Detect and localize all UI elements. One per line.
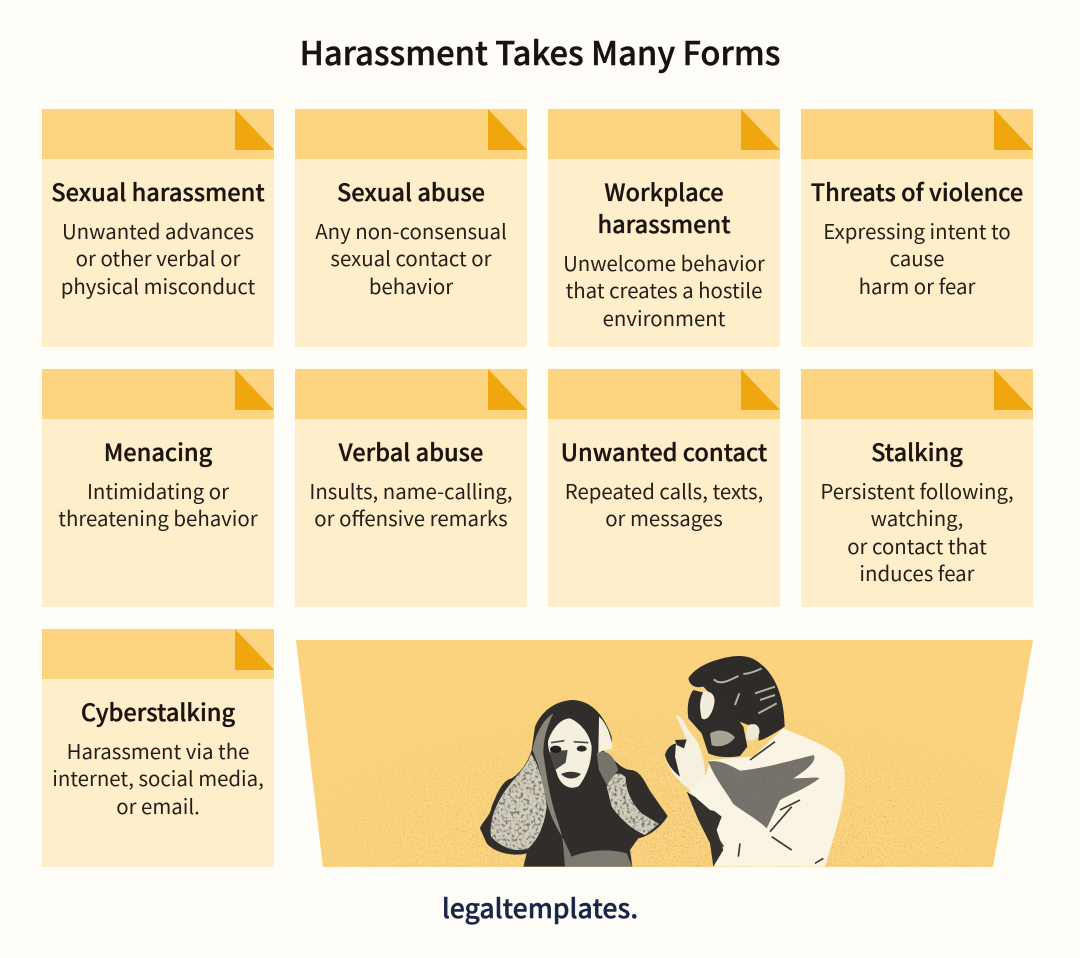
card: sexual abuse: Any non-consensual: [315, 215, 507, 245]
card: threats of violence: [801, 109, 1033, 347]
card: sexual harassment: [42, 109, 274, 347]
man face and beard: [688, 690, 747, 757]
woman eyes: [550, 746, 561, 753]
man hair: [688, 656, 785, 741]
man hair highlights: [714, 668, 777, 713]
card: workplace harassment: Unwelcome behavior: [563, 247, 765, 277]
card: menacing: Intimidating or: [87, 475, 229, 505]
woman brows and mouth: [551, 741, 588, 743]
woman face: [548, 718, 592, 788]
woman sweater hem: [562, 837, 632, 867]
illustration: banner with two figures: [296, 640, 1033, 867]
woman raised hand: [598, 717, 612, 753]
woman face shadow: [550, 750, 568, 770]
card: verbal abuse: or offensive remarks: [314, 502, 508, 532]
woman knit cuff: [597, 752, 618, 785]
card: sexual harassment: or other verbal or: [76, 242, 240, 272]
card: menacing: threatening behavior: [58, 502, 258, 532]
card: verbal abuse: Verbal abuse: [339, 434, 483, 468]
card: sexual abuse: sexual contact or: [330, 242, 492, 272]
card: menacing: Menacing: [104, 434, 212, 468]
card: stalking: [801, 369, 1033, 607]
card: threats of violence: harm or fear: [859, 270, 975, 300]
card: cyberstalking: internet, social media,: [52, 762, 264, 792]
card: threats of violence: Expressing intent to: [823, 215, 1011, 245]
card: verbal abuse: Insults, name-calling,: [309, 475, 513, 505]
card: unwanted contact: Repeated calls, texts,: [565, 475, 763, 505]
man fist and raised finger: [665, 715, 705, 788]
man dark folded sleeve: [708, 755, 819, 828]
title: Harassment Takes Many Forms: [300, 28, 780, 75]
card: sexual harassment: Unwanted advances: [62, 215, 254, 245]
man shirt: [688, 728, 845, 867]
card: cyberstalking: or email.: [116, 790, 200, 820]
card: cyberstalking: Cyberstalking: [81, 694, 235, 728]
woman right sleeve: [607, 774, 659, 835]
card: workplace harassment: environment: [603, 302, 725, 332]
card: stalking: watching,: [871, 502, 963, 532]
card: menacing: [42, 369, 274, 607]
man shirt creases: [717, 742, 823, 863]
logo: legaltemplates.: [442, 887, 638, 926]
card: stalking: Stalking: [871, 434, 963, 468]
woman left sleeve: [491, 754, 547, 850]
card: cyberstalking: [42, 629, 274, 867]
card: unwanted contact: or messages: [605, 502, 723, 532]
man ear and temple highlights: [700, 691, 715, 719]
card: threats of violence: Threats of violence: [811, 174, 1023, 208]
card: unwanted contact: [548, 369, 780, 607]
card: sexual abuse: behavior: [369, 270, 453, 300]
figure: man shouting with raised finger: [665, 656, 845, 867]
woman silhouette: [480, 700, 668, 867]
banner trapezoid: [296, 640, 1033, 867]
card: threats of violence: cause: [890, 242, 944, 272]
man dark under-arm: [687, 792, 723, 867]
card: stalking: Persistent following,: [820, 475, 1014, 505]
man cuff: [688, 778, 733, 813]
card: workplace harassment: [548, 109, 780, 347]
card: workplace harassment: Workplace: [604, 174, 724, 208]
card: verbal abuse: [295, 369, 527, 607]
banner grain texture: [317, 720, 1006, 867]
card: cyberstalking: Harassment via the: [67, 735, 249, 765]
card: unwanted contact: Unwanted contact: [561, 434, 767, 468]
card: sexual abuse: [295, 109, 527, 347]
card: sexual harassment: physical misconduct: [61, 270, 255, 300]
card: stalking: induces fear: [859, 557, 975, 587]
figure: woman covering her ears: [480, 700, 668, 867]
man knuckles shadow: [665, 739, 687, 777]
card: sexual harassment: Sexual harassment: [51, 174, 265, 208]
card: stalking: or contact that: [847, 530, 987, 560]
card: workplace harassment: harassment: [597, 206, 731, 240]
card: workplace harassment: that creates a hostile: [566, 274, 762, 304]
woman left hair strands: [532, 713, 562, 837]
card: sexual abuse: Sexual abuse: [337, 174, 485, 208]
